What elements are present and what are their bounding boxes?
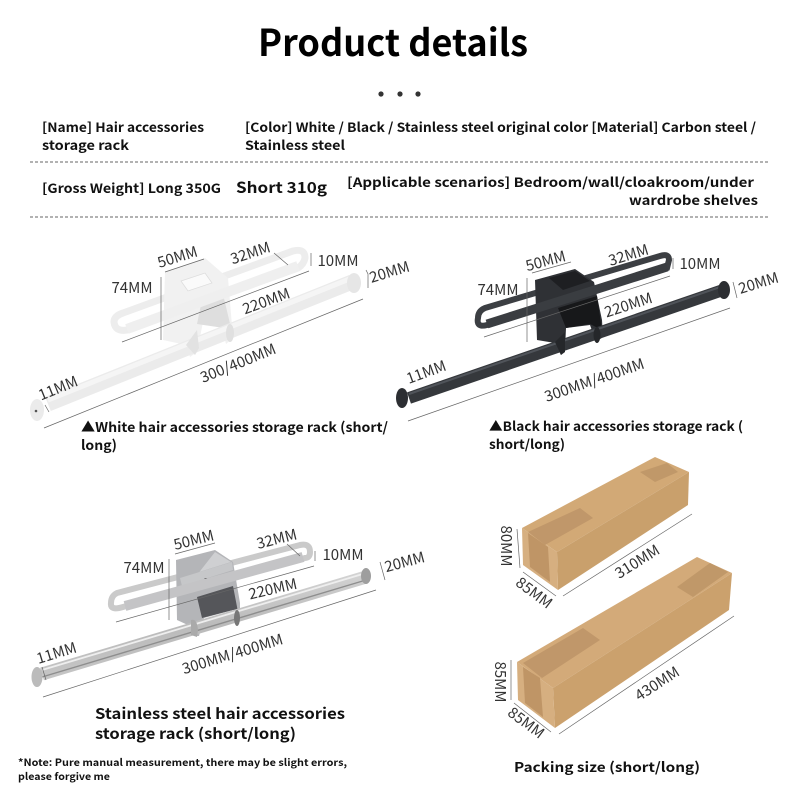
spec: color and material: Stainless steel — [245, 135, 345, 154]
stainless rack dimensions: 11MM — [34, 637, 79, 669]
white rack dimensions: 20MM — [367, 256, 412, 288]
black rack dimensions — [403, 239, 781, 421]
stainless rack dimensions: 300MM/400MM — [179, 628, 285, 679]
title: Product details — [258, 13, 528, 67]
black rack dimensions: 50MM — [523, 245, 568, 276]
white rack dimensions: 220MM — [239, 283, 293, 319]
spec: applicable scenarios — [347, 172, 758, 209]
stainless rack dimensions: 220MM — [246, 573, 299, 604]
panel: black rack — [396, 239, 781, 453]
white rack dimensions: 32MM — [228, 236, 273, 269]
white rack dimensions: 10MM — [317, 250, 359, 271]
black rack dimensions: 74MM — [477, 279, 519, 300]
spec: applicable scenarios: [Applicable scenarios] Bedroom/wall/cloakroom/under — [347, 172, 754, 191]
white rack dimensions: 11MM — [35, 370, 81, 405]
stainless rack dimensions: 50MM — [171, 525, 216, 555]
spec: gross weight — [42, 176, 327, 198]
panel: stainless steel rack — [32, 524, 427, 744]
stainless rack dimensions — [34, 524, 427, 697]
black rack dimensions: 300MM/400MM — [541, 353, 647, 407]
white rack caption: long) — [81, 434, 117, 454]
packing dimensions: 85MM — [490, 661, 511, 703]
stainless rack dimensions: 74MM — [123, 557, 165, 578]
spec: color and material — [245, 117, 756, 154]
black rack product — [396, 255, 730, 408]
black rack caption: ▲Black hair accessories storage rack ( — [489, 416, 743, 435]
packing dimensions: 430MM — [631, 661, 683, 706]
stainless rack caption: storage rack (short/long) — [95, 723, 296, 744]
long box — [517, 557, 732, 728]
white rack dimensions — [35, 236, 412, 428]
black rack dimensions: 220MM — [602, 287, 655, 322]
stainless rack caption — [95, 703, 345, 744]
black rack dimensions: 32MM — [606, 239, 651, 271]
white rack dimensions: 74MM — [111, 277, 153, 298]
packing dimensions: 310MM — [611, 539, 664, 583]
spec: name — [42, 117, 204, 154]
packing dimensions — [490, 514, 734, 743]
black rack caption — [489, 416, 743, 453]
stainless rack caption: Stainless steel hair accessories — [95, 703, 345, 724]
stainless rack dimensions: 20MM — [382, 546, 427, 577]
spec: color and material: [Color] White / Black / Stainless steel original color [Material] Carbon steel / — [245, 117, 756, 136]
white rack caption: ▲White hair accessories storage rack (short/ — [81, 416, 388, 436]
spec: name: [Name] Hair accessories — [42, 117, 204, 136]
decorative dots — [378, 91, 421, 97]
spec: gross weight: [Gross Weight] Long 350G — [42, 178, 221, 197]
footnote: *Note: Pure manual measurement, there may be slight errors, — [18, 754, 347, 769]
panel: white rack — [30, 236, 412, 454]
spec table — [30, 117, 770, 217]
black rack dimensions: 11MM — [403, 355, 449, 389]
panel: packing boxes — [490, 457, 734, 776]
spec: applicable scenarios: wardrobe shelves — [629, 190, 758, 209]
white rack caption — [81, 416, 388, 454]
black rack dimensions: 20MM — [736, 267, 781, 299]
packing caption: Packing size (short/long) — [514, 756, 700, 776]
stainless rack dimensions: 10MM — [322, 544, 364, 565]
packing dimensions: 80MM — [496, 525, 517, 567]
stainless rack product — [32, 545, 371, 687]
packing dimensions: 85MM — [504, 702, 549, 743]
packing dimensions: 85MM — [512, 572, 557, 613]
black rack caption: short/long) — [489, 434, 565, 453]
footnote — [18, 754, 347, 783]
spec: name: storage rack — [42, 135, 129, 154]
white rack product — [30, 250, 361, 421]
black rack dimensions: 10MM — [679, 253, 721, 274]
spec: gross weight: Short 310g — [236, 176, 327, 198]
white rack dimensions: 300/400MM — [197, 338, 279, 388]
stainless rack dimensions: 32MM — [254, 524, 299, 554]
footnote: please forgive me — [18, 768, 110, 783]
white rack dimensions: 50MM — [155, 241, 200, 273]
short box — [522, 457, 689, 590]
